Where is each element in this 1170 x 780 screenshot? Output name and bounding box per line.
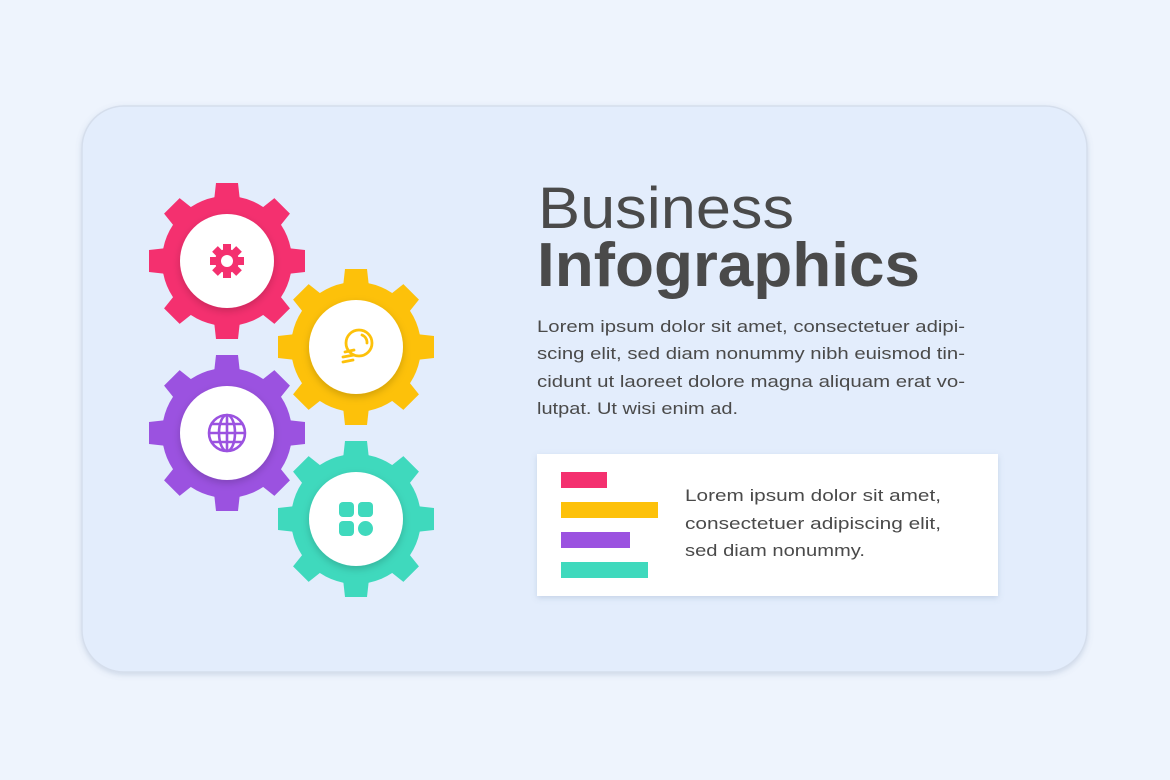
- icon: globe: [209, 415, 245, 451]
- icon: light bulb: [343, 330, 372, 362]
- text block: legend text: consectetuer adipiscing elit,: [685, 514, 941, 533]
- text block: description: scing elit, sed diam nonummy nibh euismod tin-: [537, 344, 965, 363]
- title: Infographics: [537, 231, 920, 300]
- text block: legend text: Lorem ipsum dolor sit amet,: [685, 486, 941, 505]
- gear: teal: [278, 441, 434, 597]
- text block: description: cidunt ut laoreet dolore magna aliquam erat vo-: [537, 372, 965, 391]
- text block: description: Lorem ipsum dolor sit amet, consectetuer adipi-: [537, 317, 965, 336]
- bar chart: [561, 472, 658, 578]
- gear: pink: [149, 183, 305, 339]
- text block: description: [537, 317, 965, 418]
- title: [537, 176, 920, 300]
- icon: apps grid: [339, 502, 373, 536]
- text block: legend text: [685, 486, 941, 560]
- gear: purple: [149, 355, 305, 511]
- title: Business: [538, 176, 794, 241]
- panel: legend box: [537, 454, 998, 596]
- text block: description: lutpat. Ut wisi enim ad.: [537, 399, 738, 418]
- icon: cog: [210, 244, 244, 278]
- text block: legend text: sed diam nonummy.: [685, 541, 865, 560]
- panel: main card: [82, 106, 1087, 672]
- gear: yellow: [278, 269, 434, 425]
